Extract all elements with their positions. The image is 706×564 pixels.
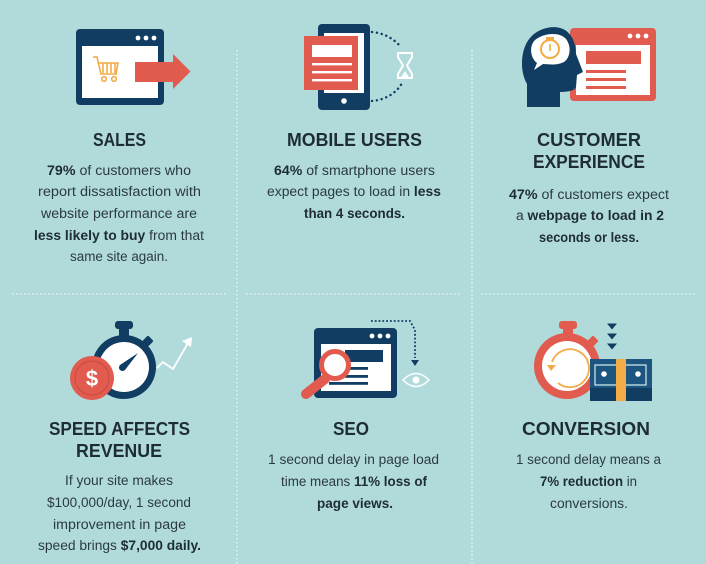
text: customer experience: a webpage to load in 2 <box>516 208 664 223</box>
text: customer experience <box>509 187 669 245</box>
heading: speed affects revenue: REVENUE <box>76 440 162 461</box>
text: mobile users: expect pages to load in less <box>267 184 441 199</box>
panel: mobile users <box>267 24 441 221</box>
panel: conversion <box>516 321 661 511</box>
text: conversion: 1 second delay means a <box>516 452 661 467</box>
icon: browser window with cart and arrow <box>76 29 190 105</box>
heading: seo: SEO <box>333 418 369 439</box>
text: mobile users: 64% of smartphone users <box>274 163 435 178</box>
text: sales: 79% of customers who <box>47 163 191 178</box>
text: seo: 1 second delay in page load <box>268 452 439 467</box>
heading: customer experience <box>533 129 645 172</box>
text: customer experience: 47% of customers expect <box>509 187 669 202</box>
text: speed affects revenue: $100,000/day, 1 second <box>47 495 191 510</box>
heading: speed affects revenue <box>49 418 190 461</box>
text: seo: page views. <box>317 496 393 511</box>
heading: conversion: CONVERSION <box>522 418 650 439</box>
text: speed affects revenue: speed brings $7,000 daily. <box>38 538 201 553</box>
text: conversion: 7% reduction in <box>540 474 637 489</box>
heading: customer experience: EXPERIENCE <box>533 151 645 172</box>
heading: speed affects revenue: SPEED AFFECTS <box>49 418 190 439</box>
icon: stopwatch with dollar coin and trend arrow <box>70 321 192 400</box>
panel: customer experience <box>509 27 669 245</box>
text: sales <box>34 163 204 264</box>
text: speed affects revenue: If your site makes <box>65 473 173 488</box>
text: sales: less likely to buy from that <box>34 228 204 243</box>
text: conversion <box>516 452 661 511</box>
panel: seo <box>268 321 439 511</box>
icon: browser with magnifier and eye <box>306 321 429 398</box>
text: seo: time means 11% loss of <box>281 474 427 489</box>
text: speed affects revenue <box>38 473 201 553</box>
panel: speed affects revenue <box>38 321 201 553</box>
text: seo <box>268 452 439 511</box>
text: mobile users: than 4 seconds. <box>304 206 405 221</box>
text: mobile users <box>267 163 441 221</box>
icon: phone with page and hourglass <box>304 24 412 110</box>
text: conversion: conversions. <box>550 496 628 511</box>
heading: mobile users: MOBILE USERS <box>287 129 422 150</box>
icon: stopwatch with dollar coin and trend arrow: $ <box>86 366 98 391</box>
panel: sales <box>34 29 204 264</box>
icon: head with thought stopwatch and browser <box>522 27 656 107</box>
text: speed affects revenue: improvement in page <box>53 517 186 532</box>
text: sales: website performance are <box>40 206 197 221</box>
text: sales: report dissatisfaction with <box>38 184 201 199</box>
text: sales: same site again. <box>70 249 168 264</box>
heading: customer experience: CUSTOMER <box>537 129 641 150</box>
icon: stopwatch with money stack <box>534 321 652 401</box>
text: customer experience: seconds or less. <box>539 230 639 245</box>
heading: sales: SALES <box>93 129 146 150</box>
